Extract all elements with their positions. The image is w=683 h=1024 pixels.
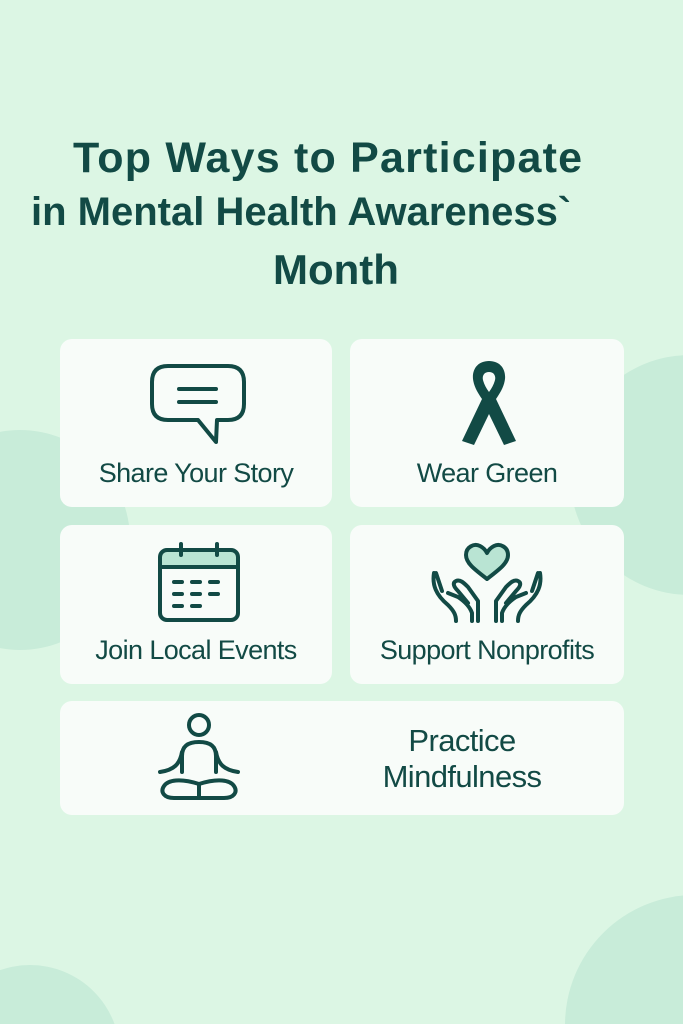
title xyxy=(31,134,583,293)
label: Join Local Events xyxy=(95,635,297,665)
title: Top Ways to Participate xyxy=(73,134,583,182)
panel: practice mindfulness xyxy=(60,701,624,815)
panel: share your story xyxy=(60,339,332,507)
panel: support nonprofits xyxy=(350,525,624,684)
title: in Mental Health Awareness` xyxy=(31,190,571,234)
icon: meditating person xyxy=(158,713,240,800)
label: Wear Green xyxy=(417,458,557,488)
label xyxy=(383,723,541,794)
title: Month xyxy=(273,246,399,293)
panel: join local events xyxy=(60,525,332,684)
panel: wear green xyxy=(350,339,624,507)
label: Practice xyxy=(408,723,516,758)
label: Support Nonprofits xyxy=(380,635,594,665)
label: Mindfulness xyxy=(383,759,541,794)
icon: calendar xyxy=(158,542,240,622)
icon: ribbon xyxy=(462,361,516,445)
icon: speech bubble xyxy=(150,364,246,444)
icon: hands with heart xyxy=(432,542,542,623)
label: Share Your Story xyxy=(99,458,293,488)
